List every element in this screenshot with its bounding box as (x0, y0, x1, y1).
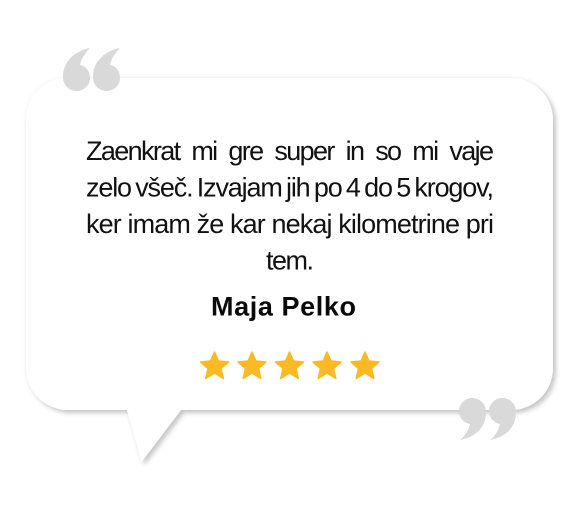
star 2 (238, 352, 266, 378)
star 4 (313, 352, 341, 378)
icon: closing quotation mark (459, 398, 516, 440)
testimonial quote text: Zaenkrat mi gre super in so mi vaje (86, 136, 494, 166)
speech bubble panel (26, 78, 553, 462)
testimonial quote text: zelo všeč. Izvajam jih po 4 do 5 krogov, (86, 172, 494, 202)
testimonial quote text (86, 136, 494, 276)
author name: Maja Pelko (211, 292, 356, 322)
testimonial quote text: ker imam že kar nekaj kilometrine pri (86, 209, 494, 239)
star 5 (351, 352, 379, 378)
star 1 (200, 352, 228, 378)
rating: five stars (200, 352, 379, 378)
star 3 (276, 352, 304, 378)
testimonial quote text: tem. (266, 246, 314, 276)
icon: opening quotation mark (63, 48, 120, 91)
